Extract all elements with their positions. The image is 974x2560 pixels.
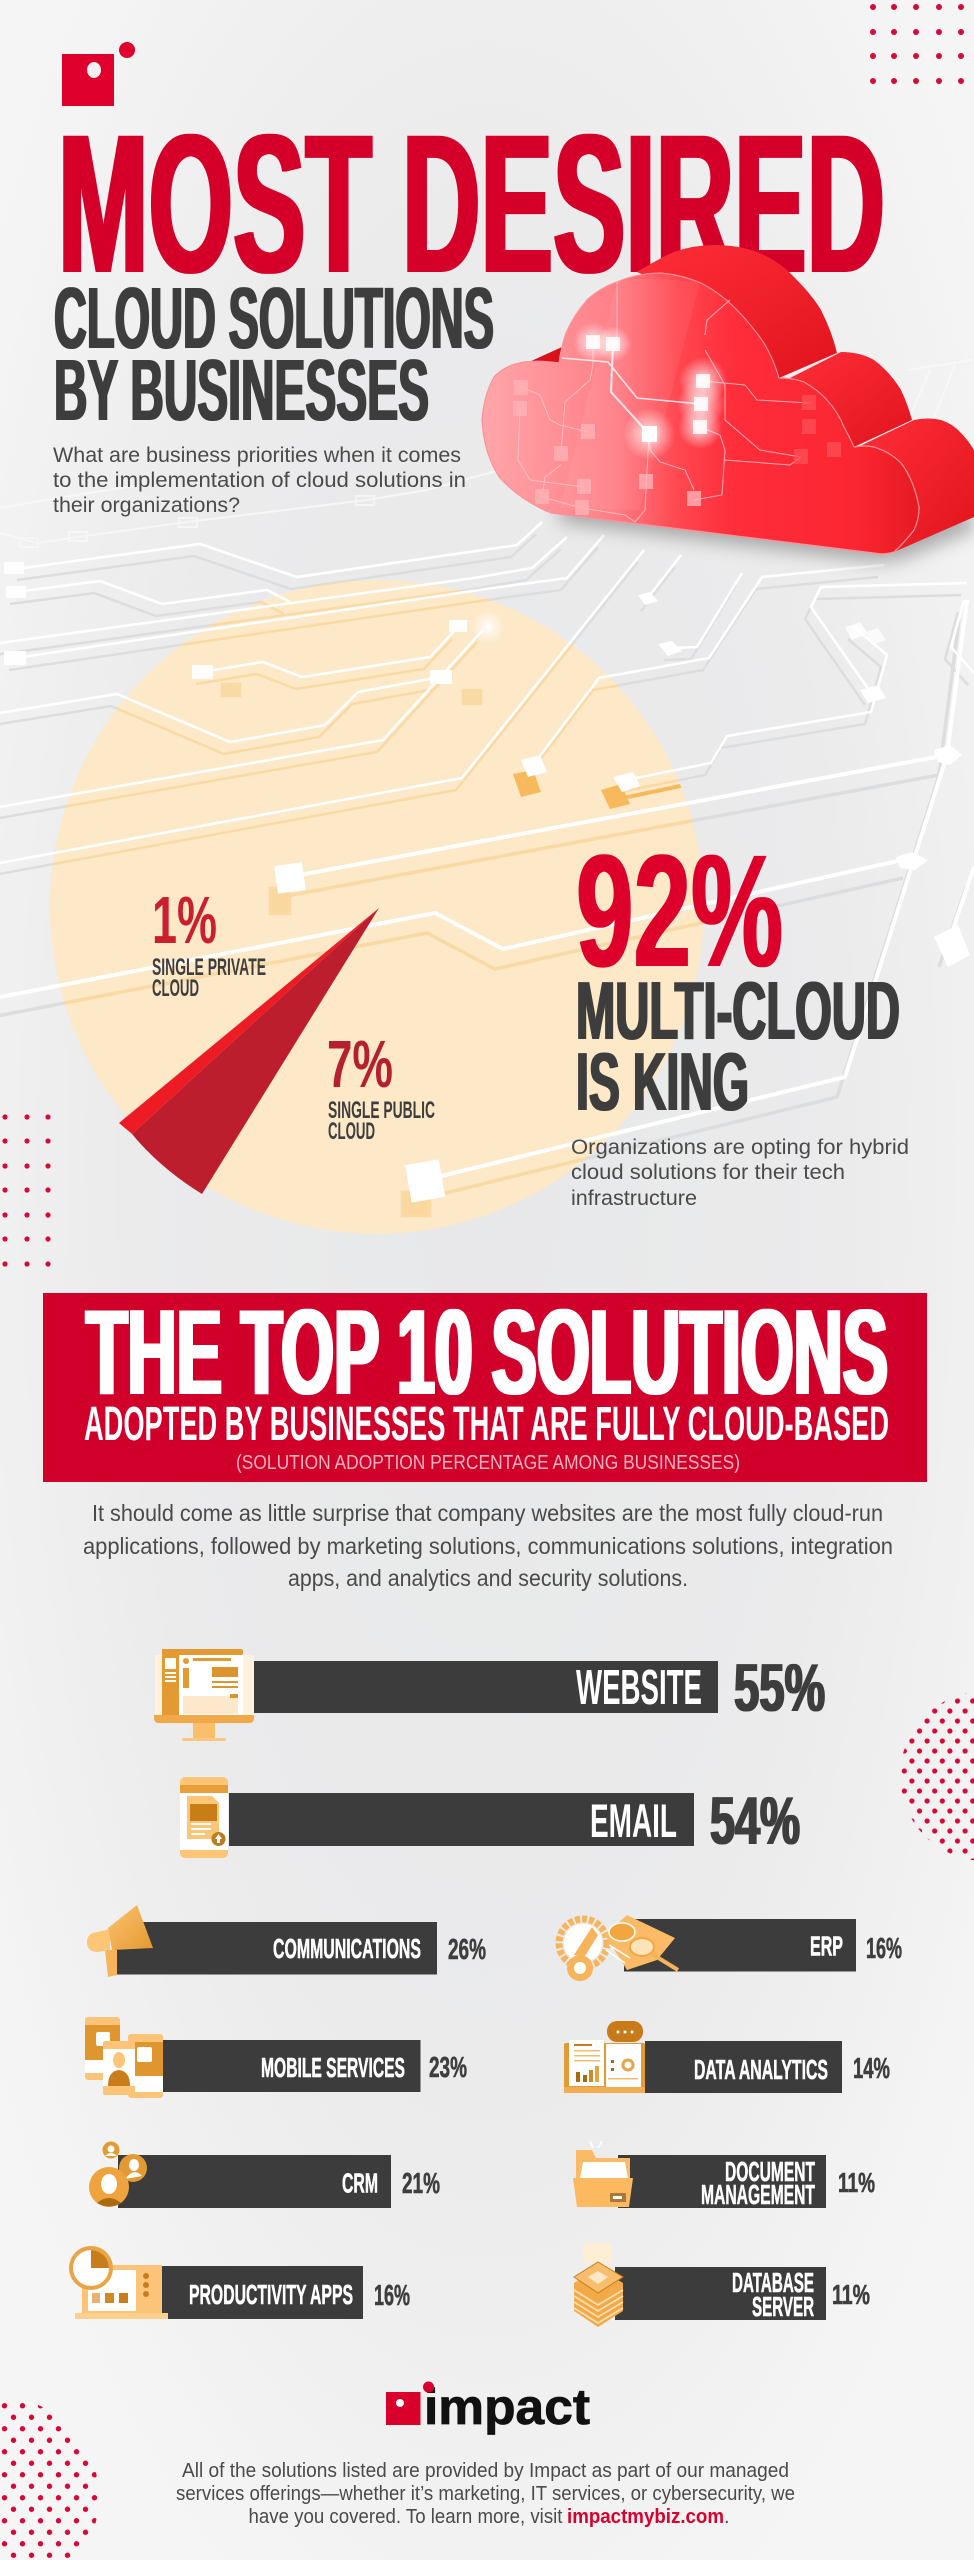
bar: erp 16 percent (624, 1919, 902, 1972)
subtitle (54, 270, 494, 439)
bar: communications 26 percent (115, 1922, 486, 1974)
bar: database server 11 percent: DATABASE (732, 2267, 814, 2298)
section paragraph: applications, followed by marketing solutions, communications solutions, integration (83, 1533, 893, 1559)
pie wedge: 1 percent (119, 908, 379, 1134)
heading: multi-cloud is king (576, 964, 900, 1128)
bar: crm 21 percent (118, 2155, 440, 2208)
cloud circuit traces (518, 282, 809, 522)
cloud node squares (513, 380, 701, 515)
decorative dot circle right (900, 1691, 974, 1861)
bar: document management 11 percent: 11% (838, 2167, 875, 2198)
bar: document management 11 percent (618, 2155, 875, 2210)
multi-cloud paragraph: Organizations are opting for hybrid (571, 1136, 909, 1159)
intro paragraph: their organizations? (53, 494, 240, 517)
bar: mobile services 23 percent: MOBILE SERVICES (261, 2052, 405, 2083)
bar: document management 11 percent: MANAGEMENT (701, 2179, 815, 2210)
pie wedge: 7 percent (132, 908, 379, 1194)
bar: productivity apps 16 percent: PRODUCTIVITY APPS (189, 2279, 353, 2310)
bar: erp 16 percent: 16% (866, 1933, 902, 1965)
yellow pie background circle (50, 580, 704, 1234)
icon: megaphone (87, 1905, 153, 1977)
label: 7 percent single public cloud: SINGLE PUBLIC (328, 1097, 435, 1124)
intro paragraph (53, 444, 466, 517)
bar: data analytics 14 percent: DATA ANALYTICS (694, 2054, 828, 2085)
bar: communications 26 percent: 26% (448, 1934, 486, 1966)
label: 7 percent single public cloud: CLOUD (328, 1118, 375, 1145)
icon: data analytics book (564, 2021, 645, 2093)
label: 1 percent single private cloud: SINGLE PRIVATE (152, 954, 266, 981)
bar: data analytics 14 percent: 14% (853, 2053, 890, 2085)
section paragraph: apps, and analytics and security solutions. (288, 1565, 688, 1591)
bar: document management 11 percent: DOCUMENT (725, 2156, 815, 2187)
multi-cloud paragraph (571, 1136, 909, 1210)
heading: multi-cloud is king: IS KING (576, 1035, 749, 1128)
bar: mobile services 23 percent (163, 2040, 467, 2092)
footer paragraph: All of the solutions listed are provided by Impact as part of our managed (182, 2460, 789, 2482)
multi-cloud paragraph: infrastructure (571, 1187, 697, 1210)
banner: top 10 solutions: (SOLUTION ADOPTION PERCENTAGE AMONG BUSINESSES) (236, 1452, 740, 1474)
icon: productivity clock and laptop (69, 2246, 168, 2319)
footer paragraph: have you covered. To learn more, visit (248, 2506, 563, 2528)
bar: email 54 percent: EMAIL (590, 1794, 677, 1847)
footer paragraph: . (724, 2506, 730, 2528)
bar: email 54 percent: 54% (710, 1783, 800, 1859)
icon: crm people (89, 2142, 147, 2207)
multi-cloud paragraph: cloud solutions for their tech (571, 1161, 845, 1184)
bar: database server 11 percent: 11% (832, 2279, 870, 2310)
bar: email 54 percent (229, 1783, 800, 1859)
circuit board shadows (0, 534, 968, 1200)
subtitle: CLOUD SOLUTIONS (54, 270, 494, 367)
icon: mobile phones (85, 2017, 163, 2098)
circuit shadows inside circle (52, 580, 704, 1218)
intro paragraph: to the implementation of cloud solutions in (53, 469, 466, 492)
dim cloud nodes (794, 395, 841, 464)
intro paragraph: What are business priorities when it comes (53, 444, 461, 467)
bar: crm 21 percent: CRM (342, 2168, 378, 2198)
bar: productivity apps 16 percent: 16% (374, 2280, 410, 2312)
bar: productivity apps 16 percent (162, 2266, 410, 2319)
section paragraph: It should come as little surprise that company websites are the most fully cloud-run (92, 1500, 883, 1526)
impact logo: impact (424, 2379, 590, 2435)
footer paragraph (176, 2460, 795, 2528)
label: 7 percent single public cloud: 7% (327, 1027, 393, 1102)
bar: crm 21 percent: 21% (402, 2168, 440, 2200)
bar: website 55 percent (253, 1650, 825, 1726)
circuit node squares (4, 562, 970, 1203)
section paragraph (83, 1500, 893, 1591)
decorative dot circle bottom left (0, 2397, 99, 2560)
bar: data analytics 14 percent (645, 2041, 890, 2093)
label: 7 percent single public cloud (327, 1027, 435, 1145)
bar: mobile services 23 percent: 23% (429, 2052, 467, 2084)
decorative dot grid top right (870, 4, 964, 84)
bar: database server 11 percent (615, 2267, 870, 2322)
bar: website 55 percent: WEBSITE (576, 1661, 702, 1715)
bar: website 55 percent: 55% (734, 1650, 825, 1726)
stat: 92 percent: 92% (576, 821, 783, 1000)
bar: communications 26 percent: COMMUNICATIONS (273, 1933, 421, 1964)
icon: email phone (180, 1777, 228, 1858)
icon: website monitor (154, 1649, 254, 1741)
bar: erp 16 percent: ERP (810, 1930, 843, 1962)
icon: erp gears and document (559, 1915, 678, 1981)
icon: impact logo mark (62, 42, 135, 106)
footer paragraph: impactmybiz.com (567, 2506, 724, 2528)
banner: top 10 solutions (43, 1284, 927, 1482)
pale upper circuit traces (0, 360, 974, 547)
label: 1 percent single private cloud: 1% (152, 883, 217, 958)
cloud illustration (482, 245, 974, 562)
glowing cloud nodes (573, 322, 727, 460)
label: 1 percent single private cloud: CLOUD (152, 975, 199, 1002)
subtitle: BY BUSINESSES (54, 342, 429, 439)
label: 1 percent single private cloud (152, 883, 266, 1002)
icon: folder (573, 2141, 633, 2207)
bar: database server 11 percent: SERVER (752, 2291, 814, 2322)
decorative dot grid left (2, 1114, 51, 1267)
icon: database stack (574, 2243, 623, 2327)
white circuit traces (0, 522, 974, 1180)
footer paragraph: services offerings—whether it’s marketing, IT services, or cybersecurity, we (176, 2483, 795, 2505)
